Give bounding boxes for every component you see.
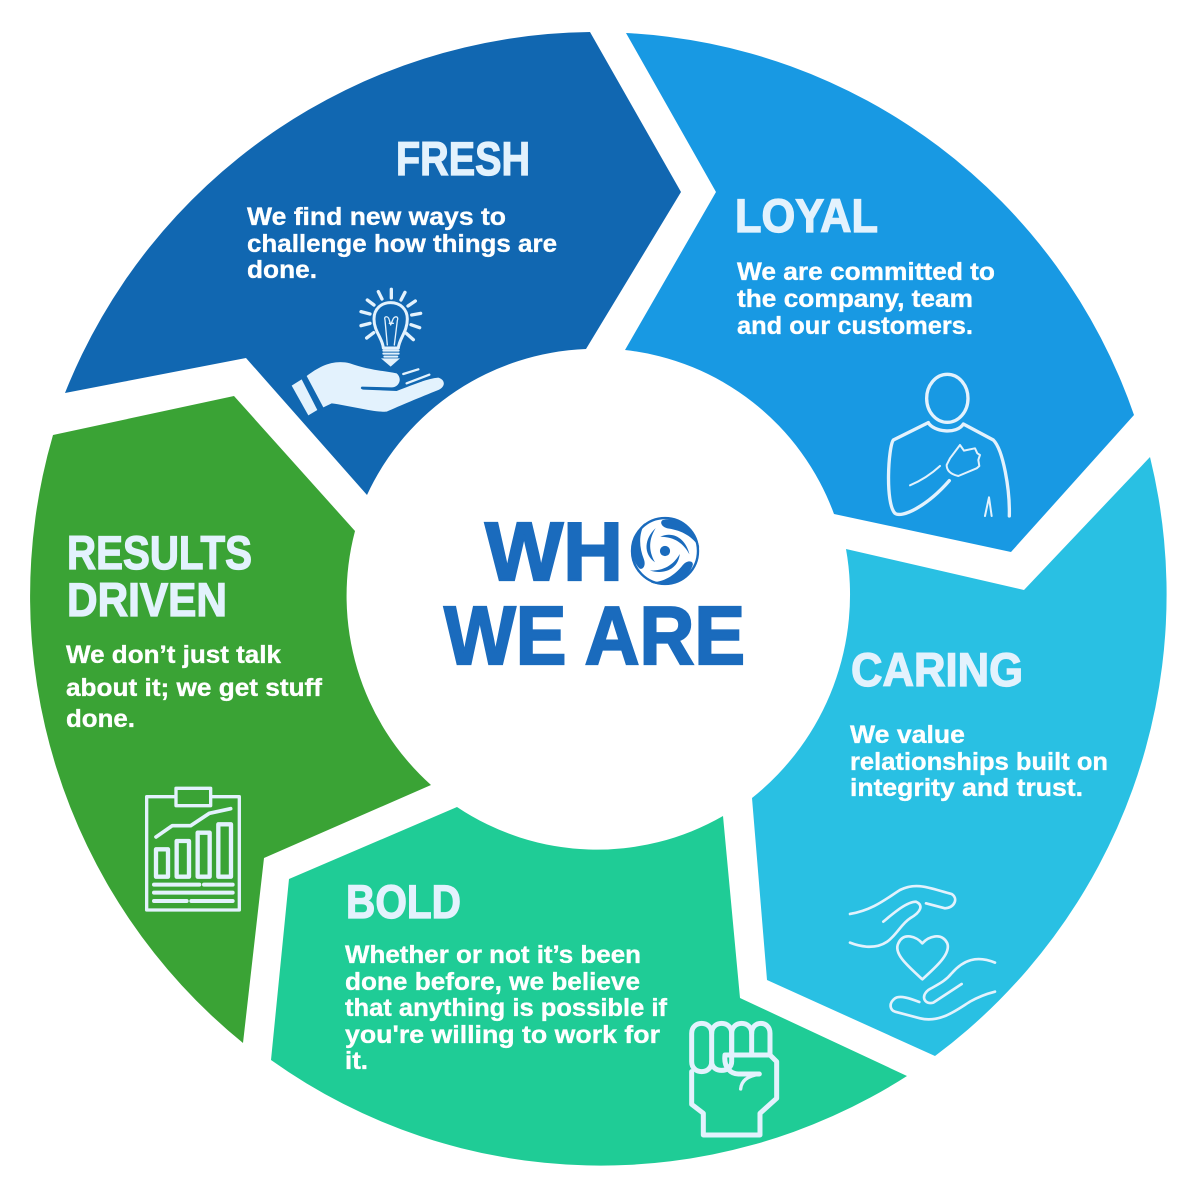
heading: fresh: FRESH xyxy=(396,132,530,185)
text: fresh description: We find new ways to xyxy=(247,203,506,231)
text: results driven description: done. xyxy=(66,705,135,733)
title: who we are: WE ARE xyxy=(444,589,745,682)
text: fresh description: challenge how things are xyxy=(247,230,557,258)
text: caring description xyxy=(850,721,1108,802)
text: bold description: Whether or not it’s been xyxy=(345,941,641,969)
heading: bold: BOLD xyxy=(346,875,461,928)
heading: results driven xyxy=(67,526,252,626)
segment: loyal background xyxy=(625,33,1134,552)
icon: person with hand on heart xyxy=(889,374,1009,516)
text: loyal description xyxy=(737,258,995,340)
title: who we are: WH xyxy=(485,505,623,598)
panel: fresh xyxy=(65,32,681,495)
segment: bold background xyxy=(271,807,907,1166)
text: bold description: done before, we believe xyxy=(345,968,640,996)
heading: results driven: DRIVEN xyxy=(67,573,227,626)
text: fresh description xyxy=(247,203,557,284)
text: bold description: you're willing to work for xyxy=(345,1021,660,1049)
text: bold description xyxy=(345,941,668,1075)
heading: results driven: RESULTS xyxy=(67,526,252,579)
panel: bold xyxy=(271,807,907,1166)
text: loyal description: and our customers. xyxy=(737,312,973,340)
panel: loyal xyxy=(625,33,1134,552)
text: loyal description: the company, team xyxy=(737,285,973,313)
icon: raised fist xyxy=(692,1023,777,1135)
icon: hands around heart xyxy=(850,886,995,1019)
segment: results driven background xyxy=(30,396,431,1043)
heading: caring: CARING xyxy=(851,643,1023,696)
segment: caring background xyxy=(752,457,1167,1056)
text: caring description: relationships built on xyxy=(850,748,1108,776)
title: who we are xyxy=(444,505,745,682)
text: bold description: it. xyxy=(345,1047,368,1075)
heading: loyal: LOYAL xyxy=(735,189,878,242)
icon: company logo xyxy=(620,518,699,597)
panel: results driven xyxy=(30,396,431,1043)
icon: light bulb over hand xyxy=(292,289,444,415)
text: loyal description: We are committed to xyxy=(737,258,995,286)
text: caring description: We value xyxy=(850,721,965,749)
text: caring description: integrity and trust. xyxy=(850,774,1083,802)
text: bold description: that anything is possible if xyxy=(345,994,668,1022)
segment: fresh background xyxy=(65,32,681,495)
icon: clipboard with bar chart xyxy=(147,788,239,910)
text: results driven description xyxy=(66,641,323,733)
text: fresh description: done. xyxy=(247,256,317,284)
text: results driven description: about it; we get stuff xyxy=(66,674,323,702)
panel: caring xyxy=(752,457,1167,1056)
text: results driven description: We don’t just talk xyxy=(66,641,281,669)
